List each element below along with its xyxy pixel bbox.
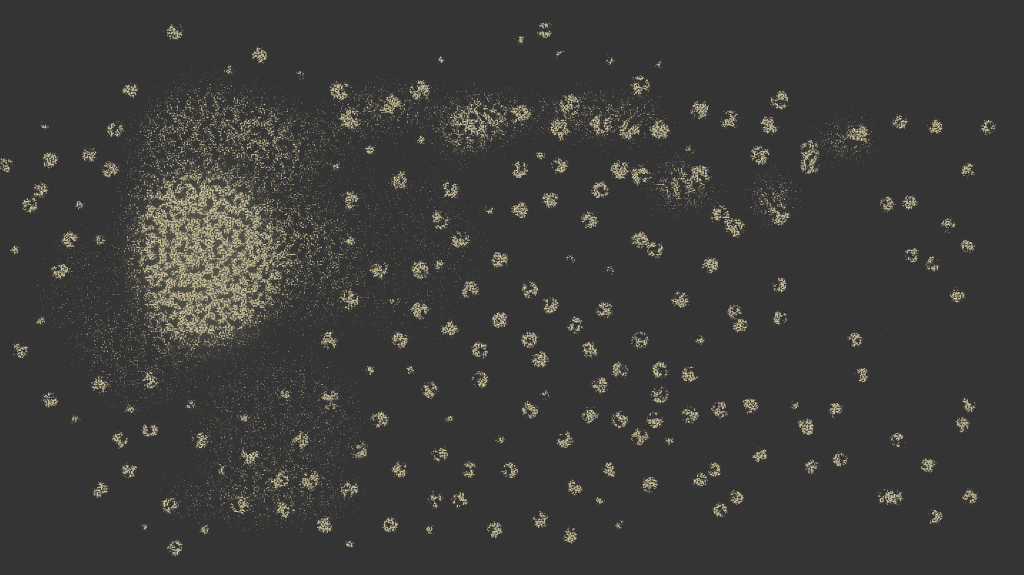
- faint haze of the dense region: [143, 176, 267, 340]
- clusters: right side: [700, 122, 988, 517]
- clusters: upper band: [340, 85, 860, 228]
- clusters: middle: [330, 165, 750, 440]
- clusters: bottom and left edge: [5, 30, 650, 548]
- small scattered clusters: [15, 40, 795, 545]
- dense core cluster: [35, 75, 873, 528]
